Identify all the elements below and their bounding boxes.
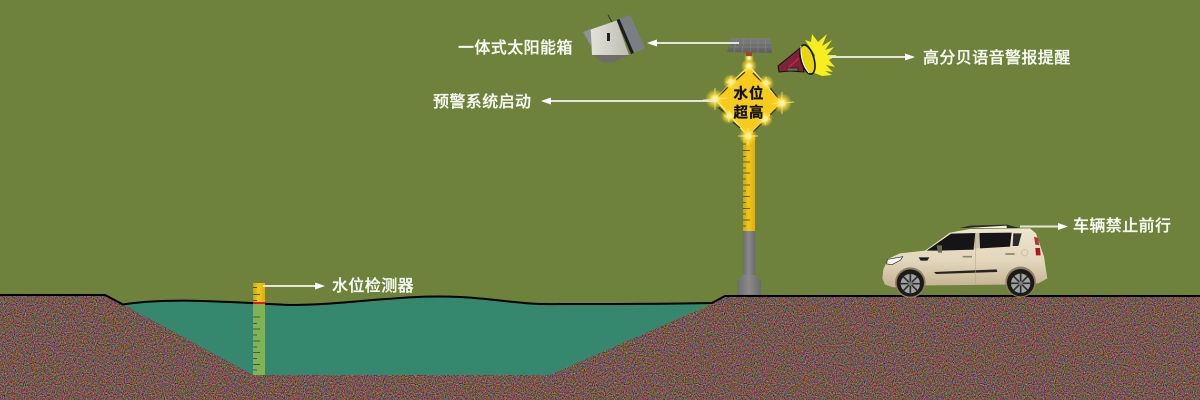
arrow: car [1020, 223, 1068, 230]
sign text second line: 超高 [734, 104, 764, 122]
front wheel [895, 267, 926, 298]
arrow: warning system [541, 98, 713, 104]
label: water detector: 水位检测器 [332, 276, 414, 295]
solar panel on pole [727, 38, 772, 56]
warning sign [703, 53, 794, 145]
icon: solar box [583, 15, 645, 62]
label: solar box: 一体式太阳能箱 [458, 39, 573, 57]
ground and water outline [0, 295, 1200, 305]
icon: horn [778, 34, 837, 76]
arrow: water detector [263, 282, 325, 290]
label: horn alert: 高分贝语音警报提醒 [923, 48, 1071, 67]
arrow: horn alert [830, 54, 915, 60]
sign text: 水位 [734, 84, 764, 102]
water body [124, 296, 712, 376]
car [882, 225, 1047, 298]
rear wheel [1005, 267, 1036, 297]
ground soil [0, 290, 1200, 400]
water level detector [253, 283, 265, 375]
pole [737, 135, 761, 295]
arrow: to solar box [647, 40, 739, 46]
sign lights [703, 53, 794, 145]
label: car: 车辆禁止前行 [1073, 217, 1171, 235]
label: warning system: 预警系统启动 [433, 93, 531, 111]
